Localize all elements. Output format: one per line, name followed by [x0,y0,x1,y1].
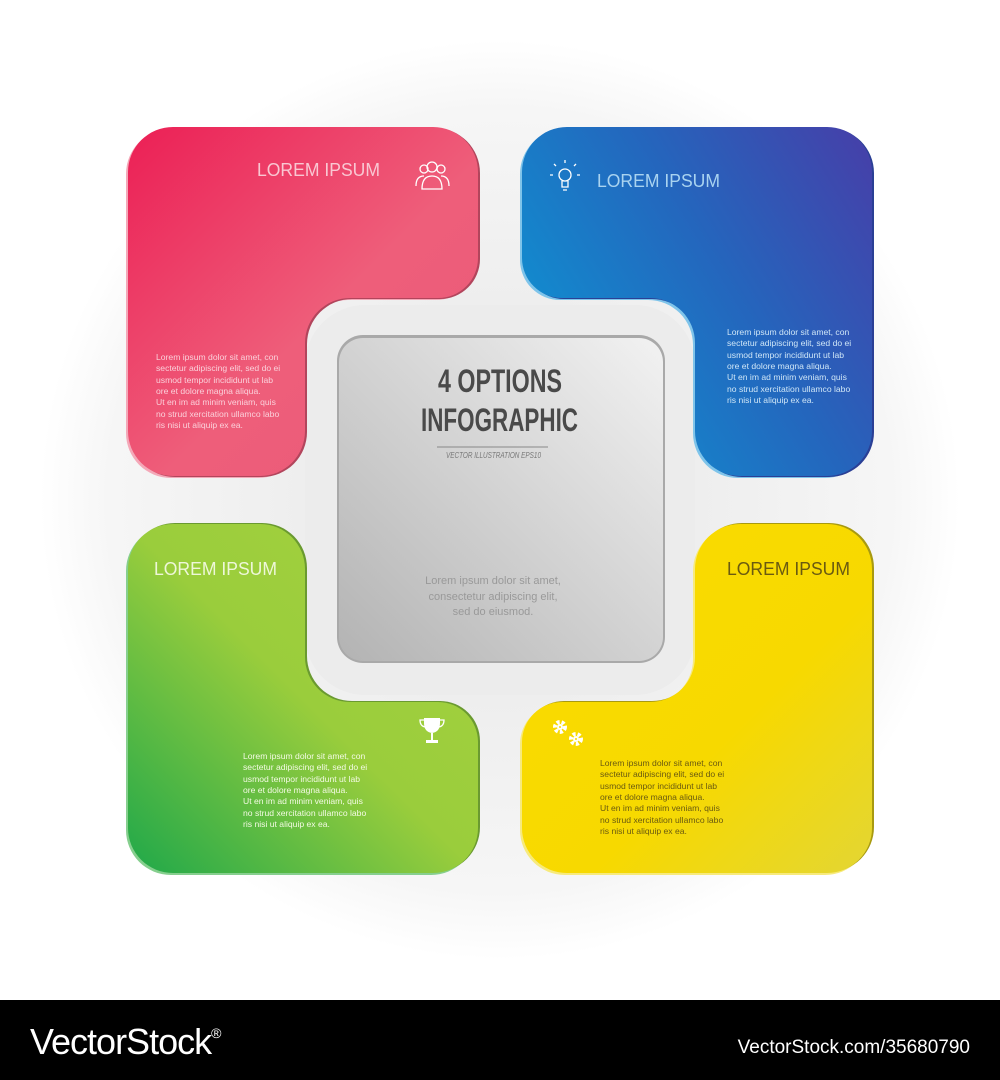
text red: ore et dolore magna aliqua. [156,386,261,396]
icon: gears [555,722,581,744]
center frame [305,305,695,695]
background glow [40,40,960,960]
text yellow: ore et dolore magna aliqua. [600,792,705,802]
icon: lightbulb [550,160,580,190]
text blue: no strud xercitation ullamco labo [727,384,850,394]
footer bar: VectorStock.com/35680790 [738,1037,970,1058]
heading blue: LOREM IPSUM [597,171,720,191]
center text: consectetur adipiscing elit, [428,591,558,603]
center title [421,363,578,460]
text green: usmod tempor incididunt ut lab [243,774,360,784]
text blue: sectetur adipiscing elit, sed do ei [727,338,851,348]
text blue: ore et dolore magna aliqua. [727,361,832,371]
center title: 4 OPTIONS [438,363,562,399]
footer bar: ® [211,1025,222,1041]
panel: yellow bottom-right [520,523,874,875]
text yellow: no strud xercitation ullamco labo [600,815,723,825]
text blue: usmod tempor incididunt ut lab [727,350,844,360]
text yellow: Ut en im ad minim veniam, quis [600,803,720,813]
heading yellow: LOREM IPSUM [727,559,850,579]
text green: sectetur adipiscing elit, sed do ei [243,762,367,772]
icon: people [416,162,449,189]
text blue: Ut en im ad minim veniam, quis [727,372,847,382]
text green: Ut en im ad minim veniam, quis [243,796,363,806]
text green: no strud xercitation ullamco labo [243,808,366,818]
text red: usmod tempor incididunt ut lab [156,375,273,385]
panel: red top-left [126,127,480,478]
text red: Lorem ipsum dolor sit amet, con [156,352,278,362]
text red: ris nisi ut aliquip ex ea. [156,420,243,430]
center text: sed do eiusmod. [453,606,533,618]
panel: green bottom-left [126,523,480,875]
text yellow: ris nisi ut aliquip ex ea. [600,826,687,836]
icon: trophy [420,718,444,743]
center title: VECTOR ILLUSTRATION EPS10 [446,451,541,460]
text blue: Lorem ipsum dolor sit amet, con [727,327,849,337]
text green: ore et dolore magna aliqua. [243,785,348,795]
footer bar: VectorStock [30,1021,211,1062]
center text: Lorem ipsum dolor sit amet, [425,575,561,587]
panel: blue top-right [520,127,874,478]
center title: INFOGRAPHIC [421,402,578,438]
text green: ris nisi ut aliquip ex ea. [243,819,330,829]
text red: sectetur adipiscing elit, sed do ei [156,363,280,373]
text red: Ut en im ad minim veniam, quis [156,397,276,407]
heading red: LOREM IPSUM [257,160,380,180]
text yellow: sectetur adipiscing elit, sed do ei [600,769,724,779]
text yellow: usmod tempor incididunt ut lab [600,781,717,791]
footer bar [0,1000,1000,1080]
text red: no strud xercitation ullamco labo [156,409,279,419]
heading green: LOREM IPSUM [154,559,277,579]
text blue: ris nisi ut aliquip ex ea. [727,395,814,405]
text yellow: Lorem ipsum dolor sit amet, con [600,758,722,768]
text green: Lorem ipsum dolor sit amet, con [243,751,365,761]
